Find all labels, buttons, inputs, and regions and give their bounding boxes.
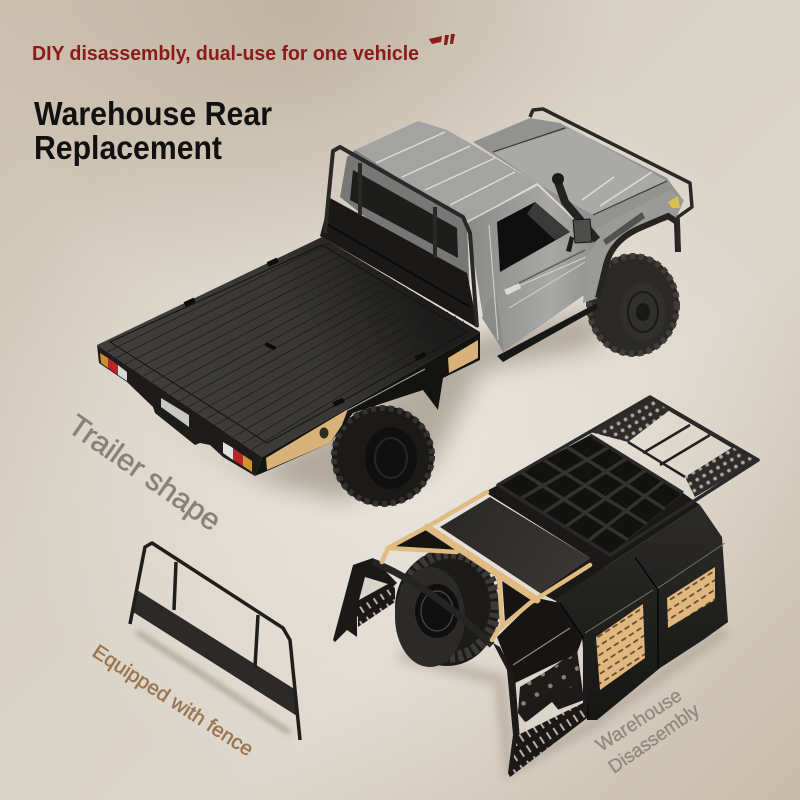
truck ground shadow [150, 310, 600, 500]
perforated plate front [685, 447, 758, 497]
front leg frame [493, 640, 588, 777]
rear wheel [332, 406, 434, 506]
perforated plate rear [590, 397, 670, 442]
warehouse module [333, 397, 758, 777]
fence uprights [174, 562, 258, 667]
fence panel [133, 590, 297, 716]
license plate [161, 398, 189, 427]
black roll bar [373, 562, 492, 645]
headlight accent [668, 196, 680, 208]
bed clips [184, 258, 427, 407]
bed grooves [107, 243, 464, 450]
bed rear face [97, 345, 262, 476]
door lines [489, 225, 586, 340]
roof rack [498, 397, 758, 555]
label: warehouse disassembly: Warehouse [592, 685, 686, 756]
lower strip [510, 703, 587, 777]
bonnet crease [493, 128, 667, 215]
mirror [573, 219, 592, 243]
subtitle: DIY disassembly, dual-use for one vehicle [32, 43, 419, 65]
tan side panel rear [266, 409, 348, 470]
rear wall of cab [340, 150, 470, 300]
headboard panel [320, 198, 478, 328]
top panel [440, 497, 590, 593]
snorkel [558, 182, 597, 240]
side edge highlight [348, 369, 425, 410]
pillar [482, 296, 504, 352]
dark fill behind roll bar [388, 527, 537, 622]
rack grid base [498, 435, 683, 555]
tan vent small [667, 567, 715, 628]
label: equipped with fence: Equipped with fence [88, 641, 257, 761]
heading: Warehouse Rear [34, 95, 272, 132]
front fender [583, 190, 684, 303]
tan vent large [596, 604, 645, 690]
tail light right [223, 442, 252, 472]
rack outline [498, 397, 758, 555]
left leg frame [333, 558, 397, 642]
flatbed side [255, 332, 480, 476]
side window [497, 202, 570, 272]
roof [355, 121, 537, 222]
bed top [97, 237, 480, 457]
door handle [504, 283, 521, 295]
end wall [497, 598, 583, 683]
cab side [468, 185, 597, 352]
bonnet [493, 128, 667, 215]
left leg opening [359, 577, 388, 600]
front wheel [587, 254, 679, 356]
warehouse shadow [400, 630, 725, 770]
hood base [473, 118, 683, 240]
heading [34, 95, 272, 166]
decorative quote marks [429, 34, 455, 45]
rear window glass [350, 170, 458, 258]
headboard frame [325, 147, 477, 327]
fence frame [130, 543, 300, 740]
storage body [555, 505, 728, 720]
rack grid bars [520, 447, 665, 541]
top deck behind rack [485, 485, 700, 603]
spare tire [395, 550, 499, 667]
tan roll bar [382, 492, 590, 640]
box seams and highlights [585, 543, 725, 633]
bed inner border [110, 245, 467, 443]
running board [497, 303, 597, 362]
tail light left [100, 353, 127, 381]
hole plate [518, 653, 580, 713]
truck [97, 109, 692, 506]
front rack [530, 109, 692, 252]
front leg opening [525, 702, 565, 735]
label: warehouse disassembly: Disassembly [605, 700, 704, 778]
fence shadow [137, 632, 290, 733]
heading: Replacement [34, 129, 222, 166]
fence [130, 543, 300, 740]
left leg lower arm [358, 585, 395, 627]
label: trailer shape: Trailer shape [62, 409, 227, 538]
open rungs [628, 410, 733, 477]
tan side panel front [448, 340, 478, 373]
